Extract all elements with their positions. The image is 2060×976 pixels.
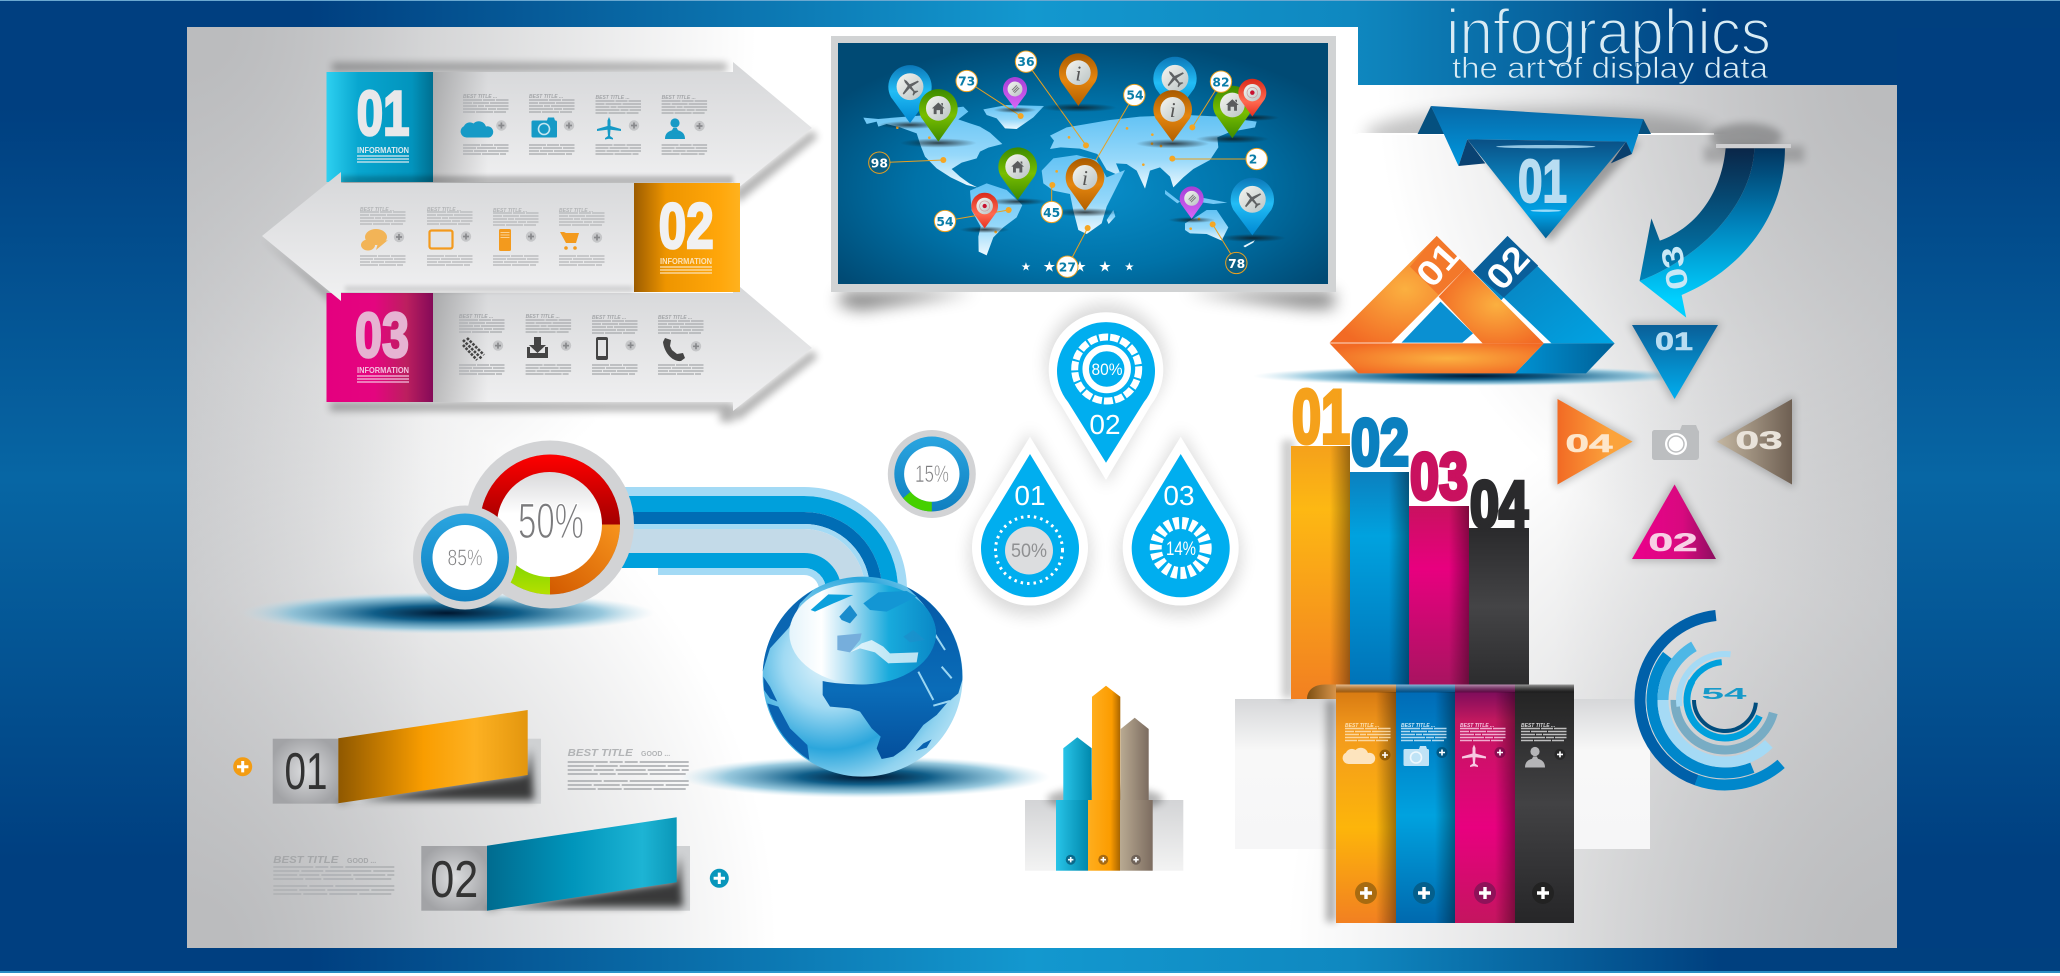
arrow 02 text columns bbox=[360, 207, 604, 265]
shelf bbox=[1235, 699, 1650, 849]
arrow 03 colour box bbox=[326, 293, 433, 402]
globe british isles bbox=[839, 605, 857, 623]
panel: drop 01 bbox=[969, 430, 1091, 616]
bottom light strip bbox=[0, 948, 2060, 973]
globe madagascar bbox=[916, 739, 932, 751]
panel: drop 03 bbox=[1120, 430, 1242, 616]
globe greenland bbox=[811, 594, 853, 612]
panel: three arrow banners bbox=[262, 62, 818, 422]
globe glass lens bbox=[789, 582, 936, 684]
globe iberia bbox=[837, 633, 862, 652]
gray disc bbox=[1005, 526, 1053, 574]
number box bbox=[421, 846, 487, 911]
text block 02: GOOD ... bbox=[347, 858, 376, 865]
pin: purple 2 bbox=[1180, 186, 1204, 219]
heading 03: 03 bbox=[355, 301, 409, 371]
ribbon shadow bbox=[487, 855, 683, 910]
arrow 01 text columns: BEST TITLE ... bbox=[463, 94, 497, 100]
arrow 03 text columns: BEST TITLE ... bbox=[526, 314, 560, 320]
pin: plane blue bbox=[888, 65, 932, 123]
orange tab bbox=[1410, 236, 1467, 295]
rating stars: ★ bbox=[1043, 259, 1056, 276]
column 03 bbox=[1409, 439, 1469, 685]
lower bar blue bbox=[1056, 800, 1088, 871]
rating stars: ★ bbox=[1073, 259, 1087, 276]
box label 03 bbox=[357, 366, 409, 382]
column 01: 01 bbox=[1292, 375, 1350, 460]
arrow 03 icons bbox=[463, 337, 685, 361]
label 01: 01 bbox=[1408, 235, 1468, 295]
pin: home green bbox=[919, 89, 958, 142]
column 01 bbox=[1291, 375, 1350, 699]
pin: plane blue 3 bbox=[1231, 178, 1274, 235]
lower column black bbox=[1515, 684, 1574, 923]
gauge: 15 percent bbox=[888, 430, 976, 518]
text block 01: BEST TITLE bbox=[568, 748, 633, 759]
blue base bbox=[1515, 343, 1615, 373]
gray card bbox=[273, 739, 541, 804]
map content bbox=[863, 51, 1286, 277]
pin: info orange 2: i bbox=[1170, 98, 1176, 122]
blue tab bbox=[1473, 236, 1538, 298]
panel: orange and blue triangle bbox=[1253, 235, 1697, 386]
column 02 bbox=[1350, 405, 1409, 685]
lower column magenta bbox=[1455, 684, 1515, 923]
data bubbles: 78 bbox=[1228, 257, 1245, 271]
panel: world map bbox=[831, 36, 1336, 310]
triangle 04 bbox=[1558, 399, 1632, 484]
lower column black: BEST TITLE ... bbox=[1521, 723, 1555, 729]
column 04 bbox=[1469, 467, 1529, 685]
top edge line bbox=[0, 0, 2060, 1]
number 01: 01 bbox=[284, 743, 328, 801]
panel: triangle cluster around camera bbox=[1558, 325, 1792, 559]
shadow below gauges bbox=[240, 592, 654, 634]
column 02: 02 bbox=[1351, 405, 1409, 479]
lower ribbon curl bbox=[1307, 684, 1345, 699]
lower ribbon shadow bbox=[1326, 700, 1336, 922]
pin: purple bbox=[1003, 77, 1027, 109]
arrow 02 text columns: BEST TITLE ... bbox=[360, 207, 394, 213]
top light strip bbox=[0, 0, 2060, 28]
drop halo bbox=[969, 430, 1091, 616]
connector lines bbox=[879, 62, 1257, 267]
bar shadow bbox=[1047, 787, 1163, 811]
arrow 02 icons bbox=[361, 229, 579, 251]
rating stars: ★ bbox=[1124, 260, 1134, 274]
arrow body bbox=[1640, 148, 1785, 318]
segmented ring bbox=[1075, 337, 1139, 401]
pin shadows bbox=[878, 103, 1286, 242]
dotted ring bbox=[996, 516, 1062, 584]
lower bar orange bbox=[1088, 800, 1120, 871]
map frame bbox=[831, 36, 1336, 292]
data bubbles: 54 bbox=[936, 215, 954, 229]
ribbon shadow bbox=[338, 748, 534, 803]
pin: info orange 2 bbox=[1153, 90, 1192, 142]
data bubbles: 27 bbox=[1059, 261, 1076, 275]
arrow 02 text columns: BEST TITLE ... bbox=[427, 207, 461, 213]
number 03: 03 bbox=[1163, 480, 1195, 511]
arrow 02 orange box bbox=[634, 183, 740, 292]
box label 01 bbox=[357, 146, 409, 162]
number box bbox=[273, 739, 338, 804]
gauge: 85 percent bbox=[413, 506, 517, 610]
plus blue bbox=[710, 869, 729, 888]
column shadow bbox=[1282, 440, 1294, 698]
triangle 01 bbox=[1632, 325, 1718, 399]
drop halo bbox=[1120, 430, 1242, 616]
inner blue bbox=[1402, 302, 1473, 343]
white gap strips bbox=[1392, 298, 1552, 343]
panel: arrow bar chart bbox=[1025, 686, 1183, 871]
globe mediterranean bbox=[850, 640, 918, 663]
pin: home green 3 bbox=[998, 147, 1037, 200]
data bubbles: 45 bbox=[1043, 206, 1060, 220]
map shadow bbox=[838, 292, 1334, 310]
pin halo bbox=[1046, 303, 1166, 486]
box label 01: INFORMATION bbox=[357, 146, 409, 155]
triangle 04: 04 bbox=[1566, 430, 1613, 458]
lower column orange bbox=[1336, 684, 1396, 923]
triangle 03 bbox=[1717, 399, 1792, 484]
arrow shadows bbox=[262, 63, 818, 422]
triangle cast shadow bbox=[1470, 140, 1640, 242]
data bubbles: 36 bbox=[1017, 55, 1035, 69]
orange base bbox=[1330, 343, 1544, 373]
pin: plane blue 2 bbox=[1153, 57, 1197, 115]
inner ring bbox=[1086, 348, 1128, 390]
number 02: 02 bbox=[1089, 409, 1121, 440]
map background bbox=[838, 43, 1328, 284]
pin: info orange 3 bbox=[1066, 158, 1104, 211]
arrow 03 text columns: BEST TITLE ... bbox=[592, 315, 626, 321]
panel: folded blue triangle 01 bbox=[1358, 106, 1715, 242]
text block 01 bbox=[568, 748, 689, 789]
arrow 02 body bbox=[262, 172, 634, 301]
data bubbles: 82 bbox=[1212, 75, 1230, 89]
data bubbles: 73 bbox=[958, 75, 975, 89]
panel: curved arrow 03 bbox=[1640, 123, 1804, 318]
arrow fold shading 03 bbox=[433, 293, 488, 402]
arrow top side shadow bbox=[1704, 146, 1804, 162]
value 80 percent: 80% bbox=[1092, 360, 1122, 379]
triangle 02 bbox=[1632, 484, 1716, 559]
globe north atlantic rim bbox=[763, 590, 813, 672]
title bbox=[1446, 0, 1771, 85]
drop white border bbox=[972, 437, 1088, 606]
arrow 03 body bbox=[326, 281, 812, 411]
arrow 01 text columns: BEST TITLE ... bbox=[662, 95, 696, 101]
panel: pipes from gauges into globe bbox=[620, 492, 902, 600]
connector dots bbox=[896, 113, 1216, 233]
arrow 02 bottom shadow bbox=[345, 286, 633, 292]
arrow 01 text columns: BEST TITLE ... bbox=[529, 94, 563, 100]
white paper panel bbox=[187, 27, 1897, 948]
blue ribbon bbox=[487, 817, 677, 911]
drop blue bbox=[1132, 454, 1230, 597]
arrow 01 icons bbox=[461, 117, 685, 140]
gauge: 50 percent bbox=[466, 440, 634, 608]
pin: target red 2 bbox=[971, 193, 998, 228]
drop blue bbox=[981, 454, 1079, 597]
number 01: 01 bbox=[1014, 480, 1046, 511]
panel: ribbon columns 01-04 bbox=[1235, 375, 1650, 923]
number 01: 01 bbox=[1518, 148, 1567, 215]
pin: info orange: i bbox=[1075, 61, 1081, 85]
pin: info orange 3: i bbox=[1082, 166, 1088, 190]
label 02: 02 bbox=[1478, 238, 1538, 298]
orange ribbon bbox=[338, 710, 528, 803]
heading 01: 01 bbox=[357, 79, 410, 149]
upper bar orange bbox=[1092, 686, 1120, 800]
data bubbles: 54 bbox=[1126, 89, 1144, 103]
rating stars: ★ bbox=[1021, 260, 1031, 274]
lower column magenta: BEST TITLE ... bbox=[1460, 723, 1494, 729]
label 54: 54 bbox=[1702, 686, 1747, 703]
number 02: 02 bbox=[430, 851, 478, 909]
triangle 01: 01 bbox=[1655, 328, 1693, 356]
icon: camera bbox=[1652, 425, 1699, 460]
arrow 02 plus buttons bbox=[394, 231, 602, 243]
arrow top slot shadow bbox=[1710, 123, 1782, 151]
lower column blue bbox=[1396, 684, 1455, 923]
slot line bbox=[1358, 133, 1714, 135]
heading 02: 02 bbox=[659, 190, 714, 262]
pin: info orange bbox=[1059, 53, 1098, 106]
panel: paper ribbon 02 bbox=[273, 817, 729, 911]
lower bar tan bbox=[1120, 800, 1153, 871]
blue side bbox=[1473, 236, 1615, 343]
plus orange bbox=[233, 757, 252, 776]
slot shadow bbox=[1362, 100, 1717, 134]
globe africa and asia bbox=[823, 587, 962, 759]
swirl ring bbox=[1156, 523, 1206, 573]
gauge: 50 percent: 50% bbox=[518, 493, 584, 549]
globe south america bbox=[767, 703, 809, 760]
data bubbles: 2 bbox=[1249, 153, 1257, 167]
shadow below globe bbox=[680, 756, 1050, 798]
arrow 01 text columns bbox=[463, 94, 707, 154]
arrow 03 text columns: BEST TITLE ... bbox=[459, 314, 493, 320]
panel: paper ribbon 01 bbox=[233, 710, 689, 804]
arrow 02 text columns: BEST TITLE ... bbox=[559, 208, 593, 214]
header tab bbox=[1358, 0, 1897, 86]
continents bbox=[863, 105, 1257, 255]
upper bar tan bbox=[1121, 718, 1149, 800]
box label 02: INFORMATION bbox=[660, 257, 712, 266]
data bubbles: 98 bbox=[871, 157, 888, 171]
gray card bbox=[421, 846, 690, 911]
lower column orange: BEST TITLE ... bbox=[1345, 723, 1379, 729]
ground shadow bbox=[1253, 366, 1697, 386]
orange right band bbox=[1439, 267, 1544, 343]
triangle 02: 02 bbox=[1648, 529, 1698, 557]
box label 03: INFORMATION bbox=[357, 366, 409, 375]
text block 02 bbox=[273, 855, 394, 894]
lower column blue: BEST TITLE ... bbox=[1401, 723, 1435, 729]
pin: home green 2 bbox=[1213, 86, 1252, 138]
bottom edge line bbox=[0, 971, 2060, 973]
arrow 03 plus buttons bbox=[493, 340, 701, 351]
column 04: 04 bbox=[1470, 467, 1528, 541]
drop white border bbox=[1123, 437, 1239, 606]
arrow 02 text columns: BEST TITLE ... bbox=[493, 208, 527, 214]
globe sea lines bbox=[918, 632, 952, 706]
arrow fold shading 01 bbox=[433, 72, 488, 182]
arrow 01 colour box bbox=[326, 72, 433, 182]
arrow 02 shadow on 01 bbox=[341, 176, 733, 186]
globe bbox=[763, 577, 963, 777]
subheading: the art of display data bbox=[1452, 52, 1768, 85]
globe caribbean bbox=[763, 677, 777, 702]
arrow 01 body bbox=[326, 62, 812, 192]
box label 02 bbox=[660, 257, 712, 273]
rating stars: ★ bbox=[1098, 259, 1112, 276]
pin white border bbox=[1049, 312, 1163, 480]
gauge: 85 percent: 85% bbox=[448, 544, 482, 570]
text block 01: GOOD ... bbox=[641, 751, 670, 758]
arrow 01 text columns: BEST TITLE ... bbox=[596, 95, 630, 101]
data bubbles bbox=[869, 51, 1267, 277]
globe scandinavia and russia bbox=[863, 591, 917, 612]
value 14 percent: 14% bbox=[1166, 539, 1196, 560]
pin: target red bbox=[1238, 79, 1266, 116]
bottom white margin bbox=[0, 973, 2060, 976]
arrow number: 03 bbox=[1655, 243, 1696, 292]
globe ocean bbox=[763, 577, 963, 777]
upper bar blue bbox=[1063, 737, 1092, 800]
arrow 03 text columns bbox=[459, 314, 704, 374]
ribbon shapes bbox=[1418, 106, 1651, 238]
arrow top slot line bbox=[1716, 144, 1791, 148]
rating stars bbox=[1021, 259, 1134, 276]
triangle halos bbox=[1558, 325, 1792, 559]
orange left band bbox=[1330, 236, 1467, 343]
pin blue bbox=[1057, 322, 1155, 463]
base card bbox=[1025, 800, 1183, 871]
triangle 03: 03 bbox=[1736, 427, 1782, 455]
arrow 03 text columns: BEST TITLE ... bbox=[658, 315, 692, 321]
value 50 percent: 50% bbox=[1011, 541, 1047, 562]
panel: location pin 02 bbox=[1046, 303, 1166, 486]
chart: radial 54 bbox=[1605, 580, 1845, 820]
globe east lake bbox=[903, 630, 925, 642]
column 03: 03 bbox=[1410, 439, 1468, 513]
gauge: 15 percent: 15% bbox=[915, 461, 949, 488]
arrow 01 plus buttons bbox=[496, 120, 705, 131]
text block 02: BEST TITLE bbox=[273, 855, 339, 866]
